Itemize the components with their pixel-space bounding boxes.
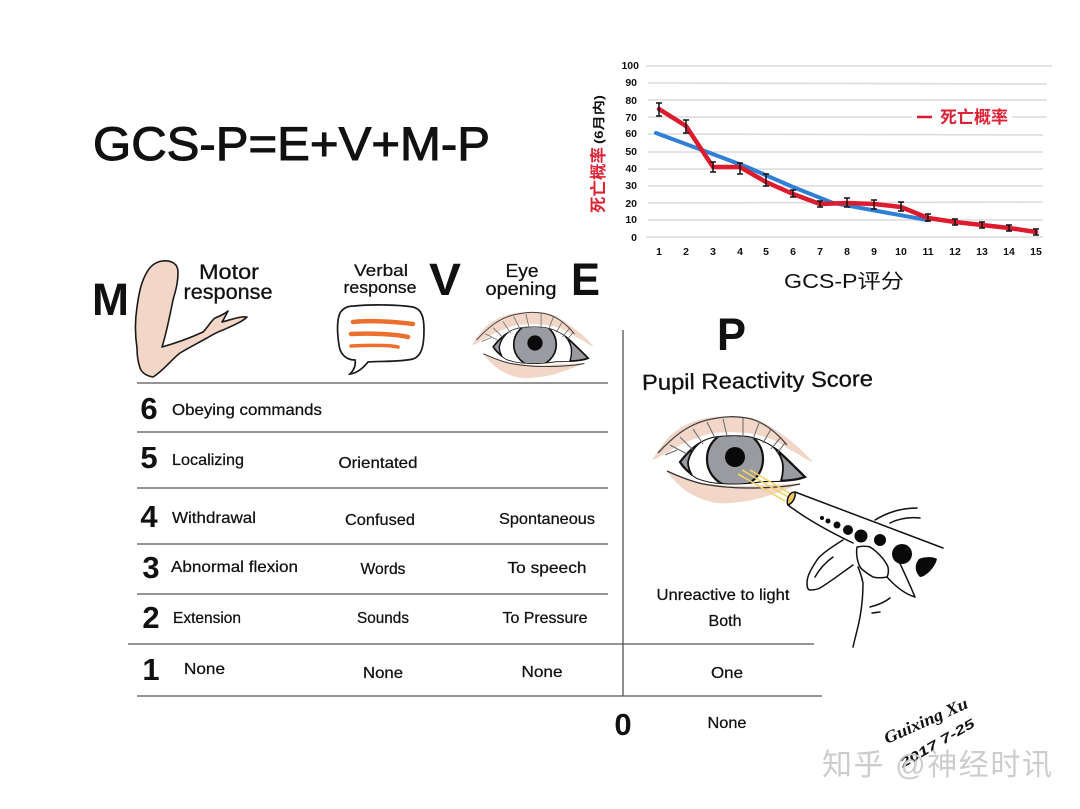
chart grid lines and y axis ticks [621,60,1052,244]
y axis title [588,95,608,213]
chart x axis ticks: 13 [976,246,988,258]
chart x axis ticks: 8 [844,246,850,258]
chart grid lines and y axis ticks: 70 [625,112,637,124]
heading: Verbal response: Verbal [354,261,408,280]
title: GCS-P formula: GCS-P=E+V+M-P [93,117,490,170]
chart x axis ticks: 11 [922,246,934,258]
letter V: V [429,254,461,305]
row 0 [614,707,747,742]
legend: mortality [912,105,1012,129]
row 2: To Pressure [502,610,588,627]
row 3: Words [360,561,406,578]
row 3: To speech [508,560,586,577]
row 1: 1 [142,652,160,687]
chart grid lines and y axis ticks: 40 [625,163,637,175]
row 1 [142,652,743,687]
chart grid lines and y axis ticks: 50 [625,146,637,158]
heading: Verbal response [344,261,416,297]
row 4: 4 [140,499,158,534]
chart x axis ticks [656,246,1042,258]
legend: mortality: 死亡概率 [940,107,1008,127]
chart x axis ticks: 14 [1003,246,1015,258]
row 4 [140,499,595,534]
chart grid lines and y axis ticks: 0 [631,232,637,244]
row 1: None [184,661,225,678]
heading: Verbal response: response [344,278,416,297]
row 5: 5 [140,440,158,475]
row 3: Abnormal flexion [171,559,298,576]
heading: Pupil Reactivity Score: Pupil Reactivity Score [642,366,873,395]
chart x axis ticks: 6 [790,246,796,258]
chart grid lines and y axis ticks: 30 [625,180,637,192]
y axis title: (6月内) [591,95,606,144]
row 5: Orientated [338,455,418,472]
heading: Motor response: response [184,281,272,304]
letter M: M [92,274,129,325]
blue trend line [656,133,927,220]
x axis title: GCS-P评分 [784,270,904,293]
icon: light beam [738,470,791,501]
row 3 [142,550,586,585]
row 6: 6 [140,391,158,426]
chart x axis ticks: 3 [710,246,716,258]
letter P: P [717,309,746,360]
chart x axis ticks: 15 [1030,246,1042,258]
y axis title: 死亡概率 [588,147,608,213]
signature: Guixing Xu [881,694,971,748]
chart x axis ticks: 7 [817,246,823,258]
icon: penlight in hand [787,492,943,647]
watermark: 知乎 @神经时讯 [822,749,1052,782]
row 2: Sounds [357,610,409,627]
signature: 2017 7-25 [896,715,978,771]
row 4: Withdrawal [172,510,256,527]
row 4: Spontaneous [499,511,595,528]
row 2: 2 [142,600,160,635]
row 6: Obeying commands [172,402,322,419]
error bars [656,103,1039,235]
letter E: E [571,254,600,305]
row 3: 3 [142,550,160,585]
chart x axis ticks: 5 [763,246,769,258]
row 5 [140,440,418,475]
row 1: None [363,665,403,682]
row 2 [142,587,790,635]
table rule lines [128,330,822,696]
chart grid lines and y axis ticks: 100 [621,60,639,72]
chart x axis ticks: 2 [683,246,689,258]
icon: small eye [472,312,594,378]
chart x axis ticks: 12 [949,246,961,258]
heading: Motor response: Motor [199,261,259,284]
heading: Eye opening: Eye [506,261,538,281]
chart grid lines and y axis ticks: 90 [625,77,637,89]
icon: large eye [652,416,813,503]
heading: Eye opening [486,261,556,299]
row 1: None [522,664,563,681]
row 4: Confused [345,512,415,529]
row 6 [140,391,322,426]
row 0: None [708,715,747,732]
heading: Eye opening: opening [486,279,556,299]
chart grid lines and y axis ticks: 60 [625,128,637,140]
chart x axis ticks: 4 [737,246,743,258]
icon: speech bubble [338,305,424,374]
chart x axis ticks: 10 [895,246,907,258]
row 1: One [711,665,743,682]
red mortality line [659,109,1036,232]
signature [881,694,978,771]
row 0: 0 [614,707,632,742]
chart grid lines and y axis ticks: 80 [625,95,637,107]
chart x axis ticks: 1 [656,246,662,258]
chart grid lines and y axis ticks: 10 [625,214,637,226]
chart grid lines and y axis ticks: 20 [625,198,637,210]
row 2: Unreactive to light [656,587,790,604]
row 5: Localizing [172,452,244,469]
chart: mortality by GCS-P score [588,60,1052,293]
heading: Motor response [184,261,272,304]
chart x axis ticks: 9 [871,246,877,258]
icon: arm [136,261,247,377]
row 2: Extension [173,610,241,627]
row 2: Both [708,613,742,630]
